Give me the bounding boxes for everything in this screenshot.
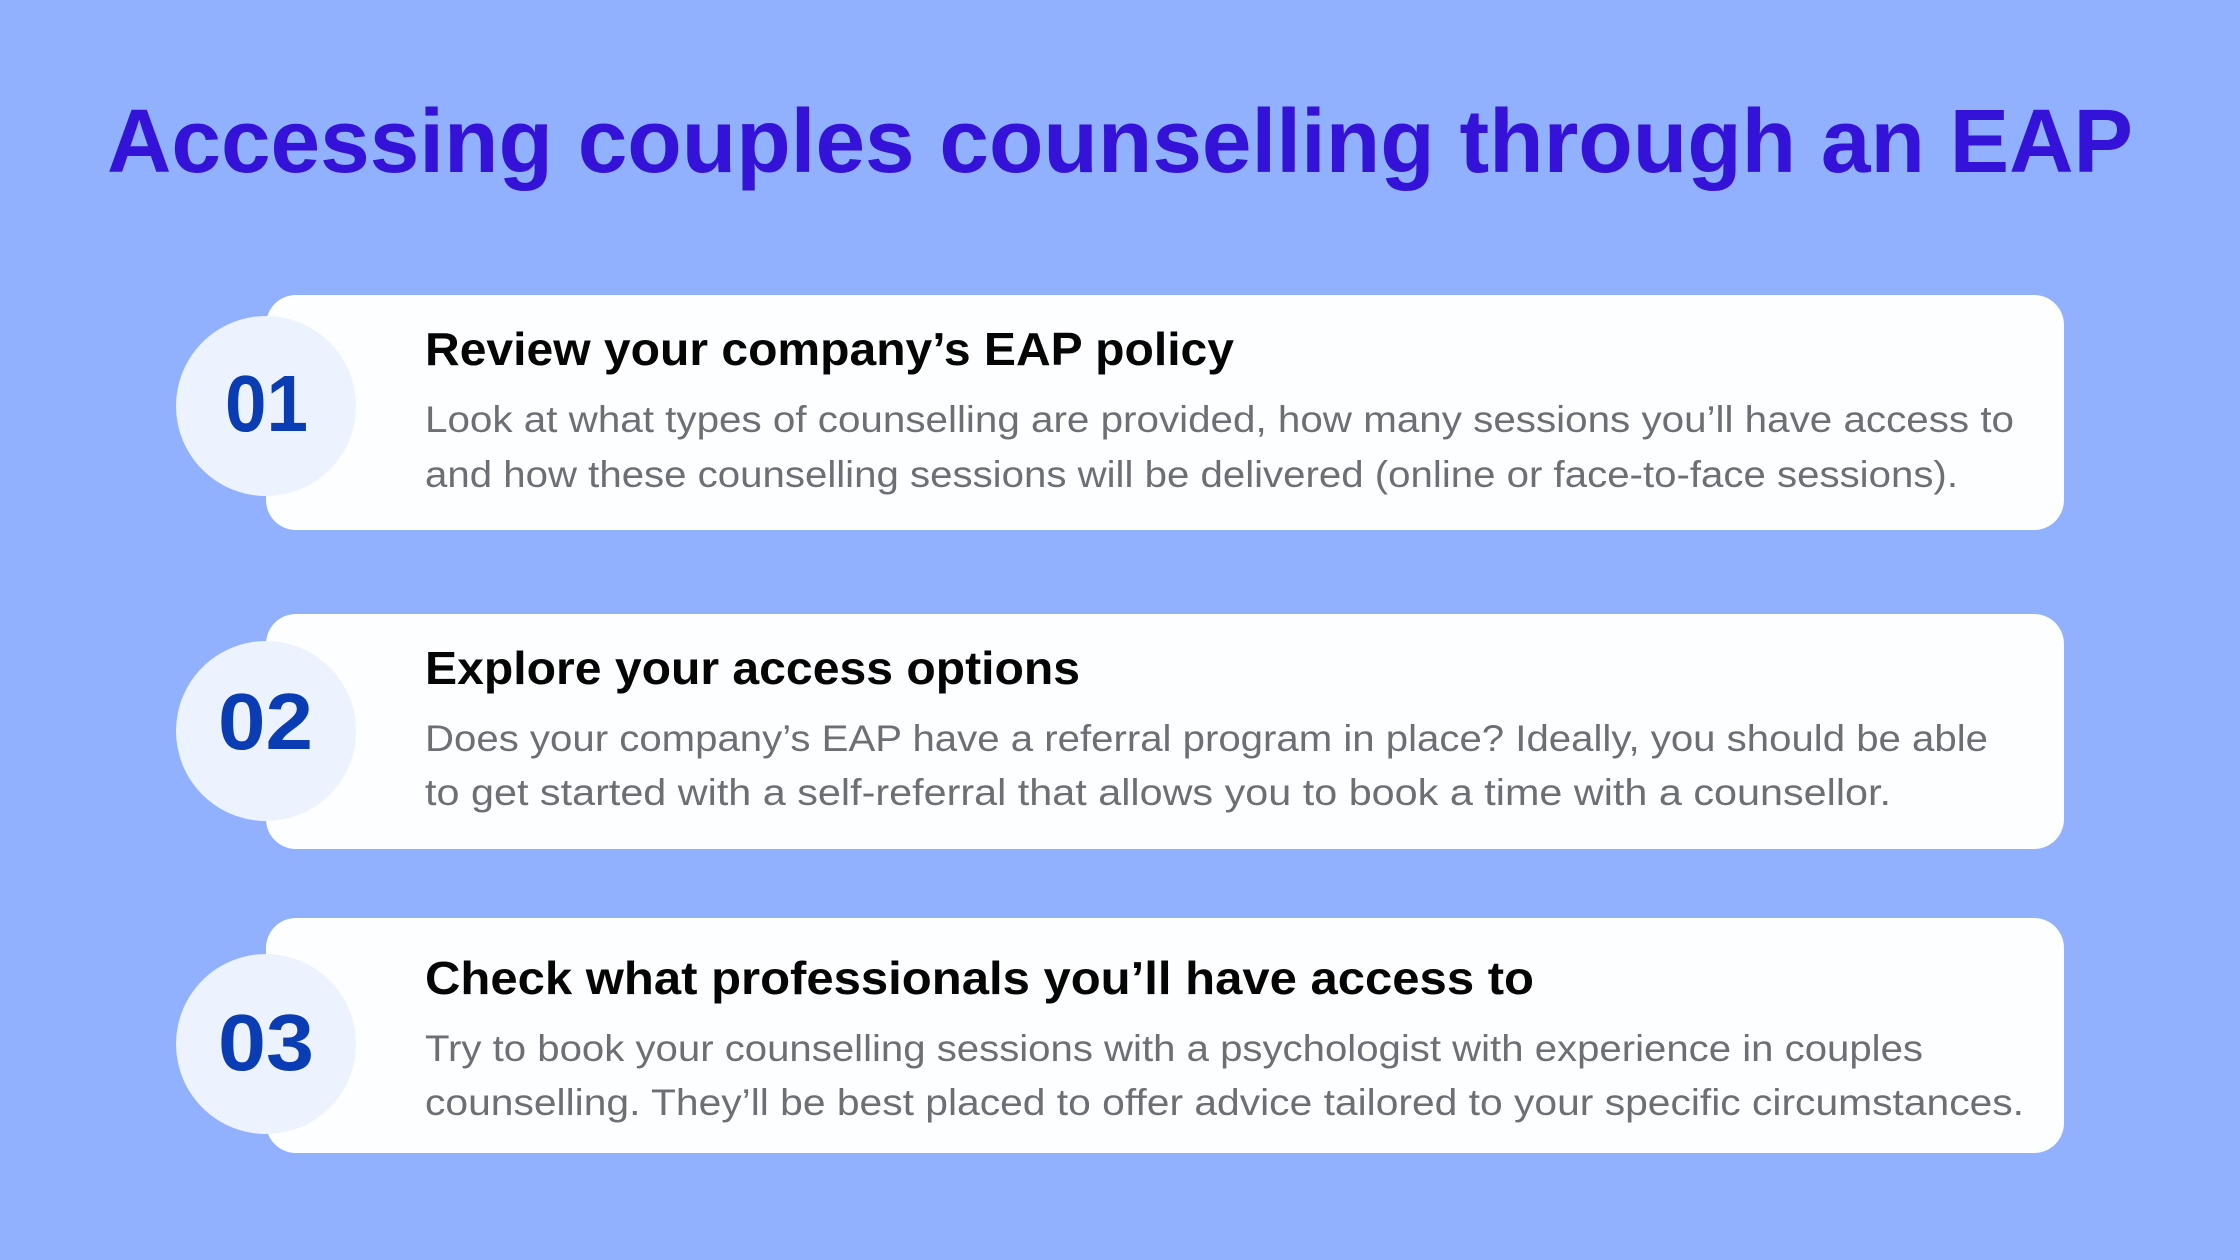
body text: step 2: Does your company’s EAP have a referral program in place? Ideally, you should be able — [425, 718, 1988, 759]
body text: step 1: Look at what types of counselling are provided, how many sessions you’ll have access to — [425, 399, 2014, 440]
number badge 02: 02 — [218, 677, 313, 766]
heading: step 3: Check what professionals you’ll have access to — [425, 952, 1534, 1004]
panel: step 3 — [176, 918, 2064, 1153]
body text: step 2 — [425, 718, 1988, 813]
heading: step 1: Review your company’s EAP policy — [425, 323, 1234, 375]
body text: step 1: and how these counselling sessions will be delivered (online or face-to-face sessions). — [425, 454, 1958, 495]
heading: step 2: Explore your access options — [425, 642, 1080, 694]
card 3 background — [266, 918, 2064, 1153]
body text: step 3: Try to book your counselling sessions with a psychologist with experience in couples — [425, 1028, 1923, 1069]
card 2 background — [266, 614, 2064, 849]
body text: step 1 — [425, 399, 2014, 495]
panel: step 1 — [176, 295, 2064, 530]
panel: step 2 — [176, 614, 2064, 849]
number badge 02 — [176, 641, 356, 821]
card 1 background — [266, 295, 2064, 530]
number badge 01 — [176, 316, 356, 496]
number badge 03: 03 — [218, 998, 314, 1087]
body text: step 2: to get started with a self-referral that allows you to book a time with a counsellor. — [425, 772, 1891, 813]
body text: step 3 — [425, 1028, 2024, 1123]
body text: step 3: counselling. They’ll be best placed to offer advice tailored to your specific circumstances. — [425, 1082, 2024, 1123]
number badge 03 — [176, 954, 356, 1134]
number badge 01: 01 — [225, 359, 308, 448]
title: Accessing couples counselling through an EAP — [107, 92, 2133, 192]
